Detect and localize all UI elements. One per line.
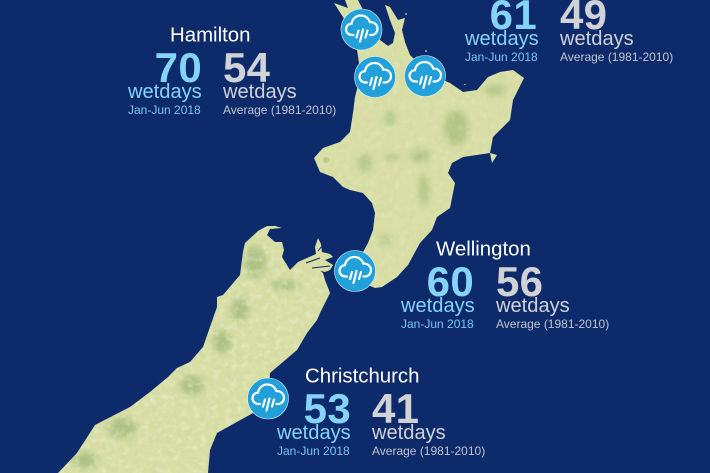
stat block: Auckland (cropped at top): wetdays	[464, 28, 539, 50]
stat block: Wellington: Average (1981-2010)	[496, 317, 609, 331]
stat block: Hamilton: Average (1981-2010)	[223, 103, 336, 117]
icon: rain cloud Wellington	[334, 250, 376, 292]
stat block: Auckland (cropped at top): wetdays	[559, 28, 634, 50]
stat block: Christchurch: wetdays	[276, 422, 351, 444]
map: offshore islands	[405, 13, 466, 85]
stat block: Hamilton: 54	[223, 44, 271, 91]
map: South Island	[58, 226, 330, 473]
stat block: Wellington: wetdays	[400, 295, 475, 317]
stat block: Wellington: wetdays	[495, 295, 570, 317]
map: North Island	[314, 0, 524, 288]
map: Marlborough Sounds	[298, 238, 333, 272]
icon: rain cloud Christchurch	[248, 378, 288, 419]
stat block: Christchurch: wetdays	[371, 422, 446, 444]
stat block: Auckland (cropped at top): Jan-Jun 2018	[465, 50, 538, 64]
stat block: Hamilton: Jan-Jun 2018	[128, 103, 201, 117]
icon: rain cloud Tauranga	[404, 56, 446, 96]
stat block: Hamilton: wetdays	[127, 81, 202, 103]
stat block: Wellington: 56	[496, 258, 543, 305]
stat block: Wellington: 60	[427, 258, 474, 305]
stat block: Hamilton: 70	[155, 44, 202, 91]
stat block: Wellington: Wellington	[436, 238, 531, 260]
stat block: Wellington: Jan-Jun 2018	[401, 317, 474, 331]
stat block: Hamilton	[127, 24, 336, 117]
stat block: Auckland (cropped at top): Average (1981-2010)	[560, 50, 673, 64]
stat block: Auckland (cropped at top)	[464, 0, 673, 64]
icon: rain cloud Hamilton	[354, 56, 396, 98]
stat block: Christchurch: Average (1981-2010)	[372, 444, 485, 458]
stat block: Christchurch: Jan-Jun 2018	[277, 444, 350, 458]
stat block: Christchurch: 41	[372, 385, 419, 432]
stat block: Hamilton: Hamilton	[170, 24, 250, 46]
icon: rain cloud Auckland north	[341, 9, 382, 50]
stat block: Christchurch	[276, 366, 485, 458]
stat block: Christchurch: Christchurch	[305, 366, 419, 388]
stat block: Hamilton: wetdays	[222, 81, 297, 103]
stat block: Christchurch: 53	[304, 385, 351, 432]
stat block: Wellington	[400, 238, 609, 331]
